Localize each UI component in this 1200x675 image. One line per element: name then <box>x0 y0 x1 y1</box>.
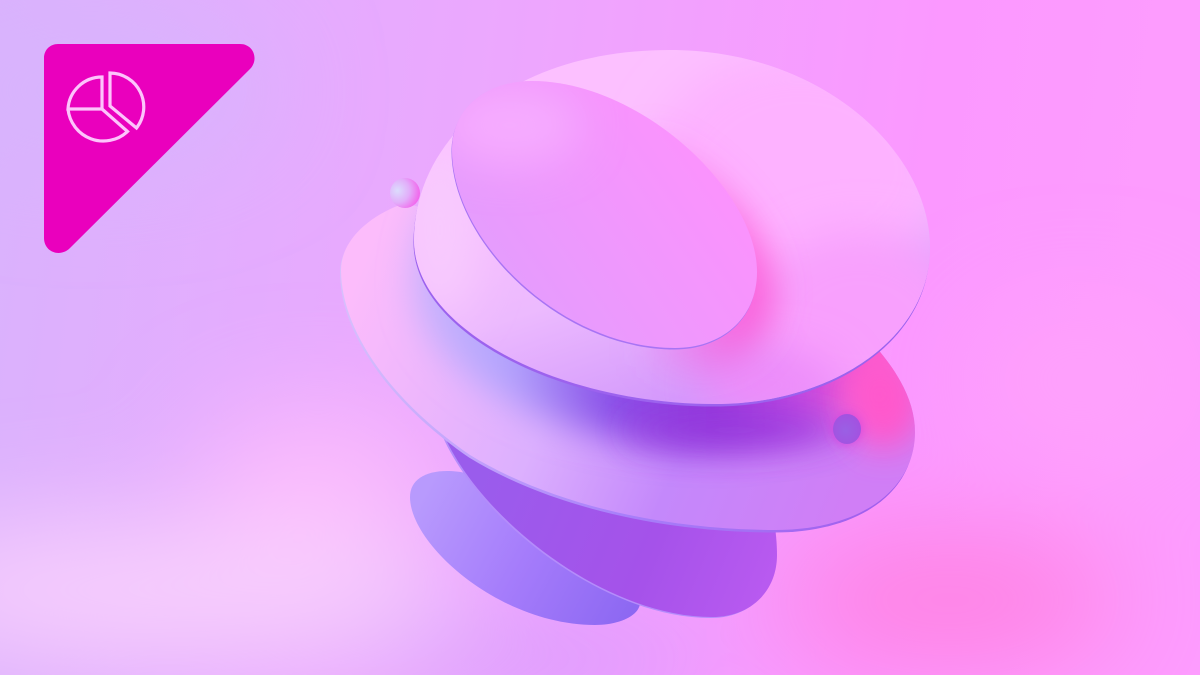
small dot on middle disc <box>832 413 862 445</box>
small sphere <box>390 178 420 208</box>
lowest disc <box>410 471 640 625</box>
inner raised disc <box>440 81 757 350</box>
middle disc <box>340 206 915 532</box>
corner badge <box>44 44 255 253</box>
icon: pie chart <box>68 73 144 141</box>
top disc <box>414 50 930 406</box>
lower back disc <box>438 425 777 618</box>
